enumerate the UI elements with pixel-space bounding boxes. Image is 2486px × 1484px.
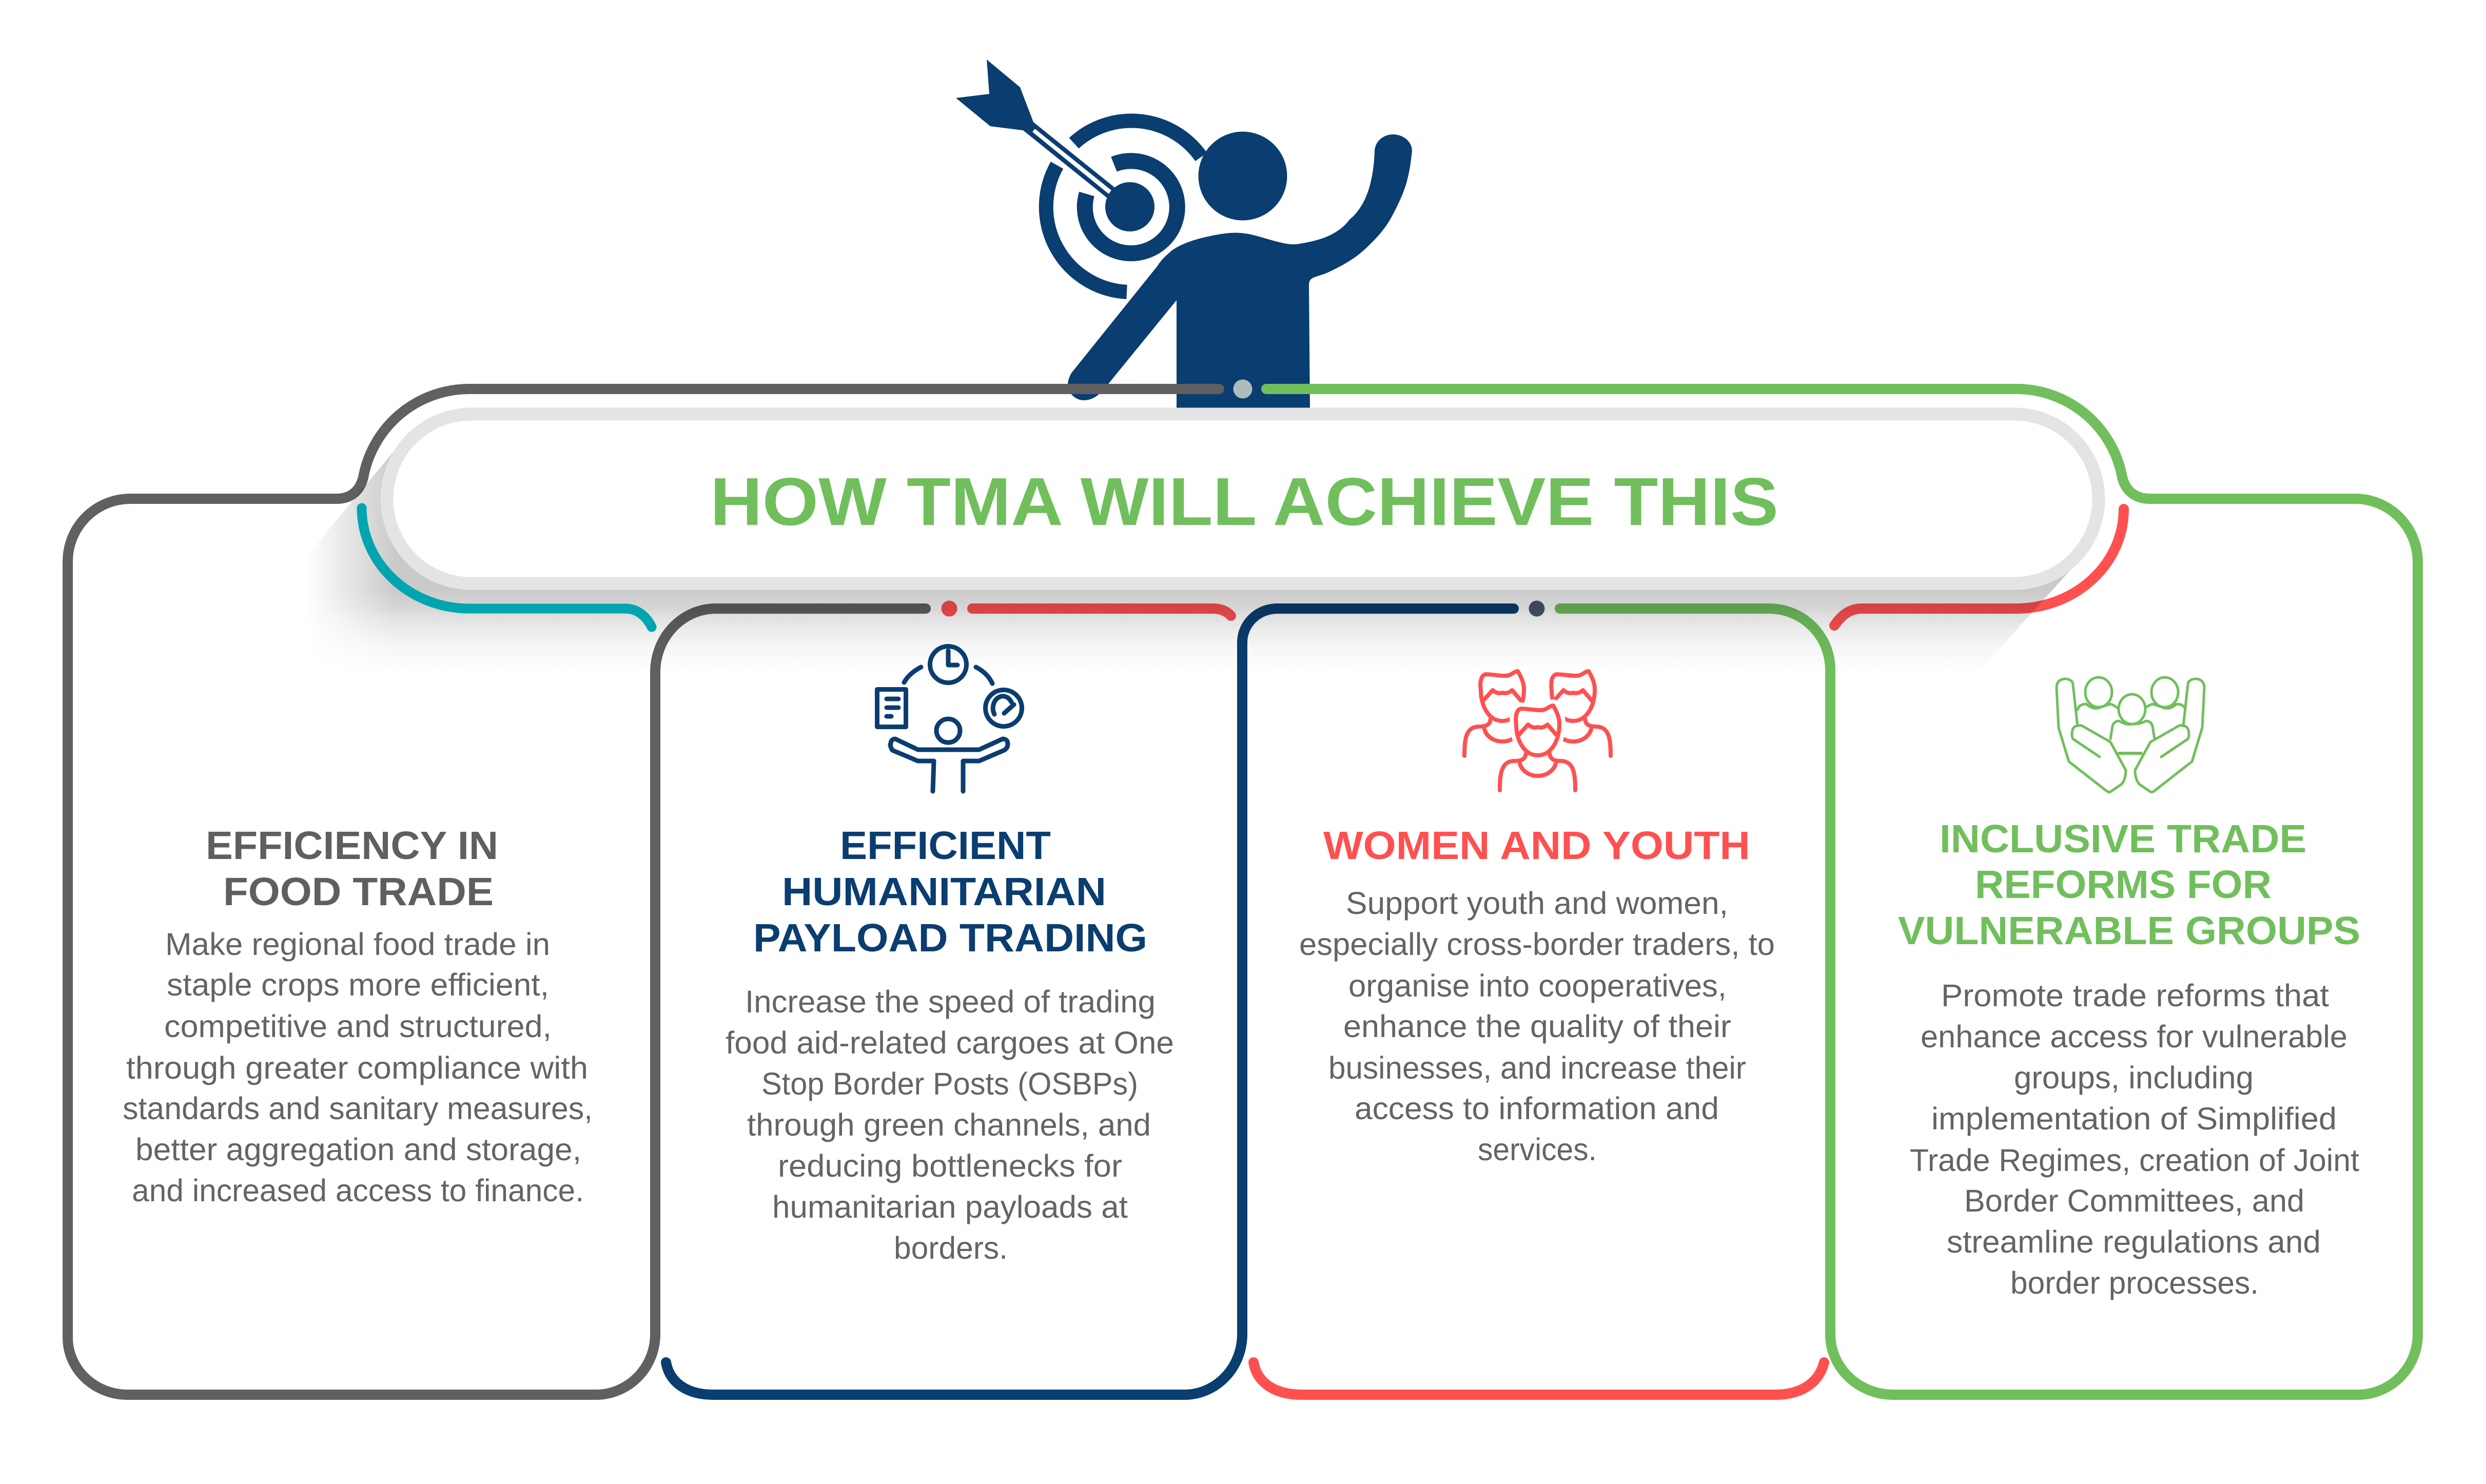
panel text: inclusive trade reforms for vulnerable groups (1898, 817, 2360, 1300)
heading: PAYLOAD TRADING (753, 916, 1147, 960)
body: services. (1478, 1132, 1597, 1167)
body: access to information and (1355, 1091, 1719, 1126)
body: Promote trade reforms that (1941, 978, 2329, 1013)
body: standards and sanitary measures, (123, 1091, 593, 1126)
icon: juggling tasks (877, 647, 1022, 791)
body: enhance access for vulnerable (1921, 1019, 2347, 1054)
heading: HUMANITARIAN (782, 870, 1106, 914)
centre person (1500, 706, 1575, 790)
body: through green channels, and (747, 1107, 1151, 1142)
heading: EFFICIENT (840, 824, 1051, 868)
header drop shadow (321, 452, 2070, 650)
heading: EFFICIENCY IN (206, 824, 498, 868)
navy connector dot (1529, 600, 1544, 617)
panel text: efficient humanitarian payload trading (726, 824, 1174, 1265)
body: and increased access to finance. (132, 1173, 584, 1208)
body: staple crops more efficient, (167, 967, 549, 1002)
body (1910, 978, 2359, 1300)
body: Make regional food trade in (165, 927, 550, 962)
heading: WOMEN AND YOUTH (1323, 824, 1750, 868)
juggling person (890, 719, 1008, 791)
accent curve: teal under header left (362, 508, 652, 627)
body: groups, including (2014, 1060, 2254, 1095)
clock (930, 647, 967, 682)
body (1299, 886, 1775, 1167)
body: reducing bottlenecks for (778, 1148, 1122, 1183)
heading: FOOD TRADE (223, 870, 494, 914)
gauge (985, 690, 1022, 727)
arcs between clock and items (904, 667, 992, 684)
body: food aid-related cargoes at One (726, 1025, 1174, 1060)
body: enhance the quality of their (1343, 1009, 1731, 1044)
arrow hitting target (956, 60, 1114, 198)
body: Support youth and women, (1346, 886, 1728, 921)
right person (1551, 671, 1611, 756)
target rings (1046, 121, 1201, 292)
body: Stop Border Posts (OSBPs) (761, 1066, 1138, 1101)
heading (1898, 817, 2360, 953)
heading (753, 824, 1147, 960)
body: borders. (894, 1231, 1008, 1265)
panel border: efficiency in food trade, header outline and humanitarian top (grey) (68, 389, 1219, 1395)
top connector dot (1234, 380, 1252, 398)
person body (1068, 134, 1412, 408)
heading (206, 824, 498, 914)
left person (1464, 671, 1524, 756)
document (877, 690, 906, 727)
icon: women and youth group (1464, 671, 1611, 790)
panel border: inclusive trade reforms and women and youth top (green) (1266, 389, 2418, 1395)
panel border: efficient humanitarian payload trading and women top (navy) (666, 609, 1514, 1395)
title banner (387, 414, 2099, 583)
heading: REFORMS FOR (1975, 863, 2272, 907)
body: businesses, and increase their (1328, 1050, 1746, 1085)
panel text: women and youth (1299, 824, 1775, 1167)
body: competitive and structured, (164, 1009, 552, 1044)
person head (1199, 131, 1287, 221)
left hand (2057, 679, 2126, 792)
heading: VULNERABLE GROUPS (1898, 909, 2360, 953)
body: border processes. (2010, 1265, 2259, 1300)
accent curve: red top of humanitarian panel (972, 609, 1231, 616)
body: Trade Regimes, creation of Joint (1910, 1143, 2359, 1178)
title text: HOW TMA WILL ACHIEVE THIS (710, 464, 1778, 539)
hero icon: person pointing at target with arrow (956, 60, 1412, 408)
body: streamline regulations and (1947, 1224, 2321, 1259)
three people (2078, 677, 2185, 753)
body: especially cross-border traders, to (1299, 927, 1775, 962)
target bullseye (1105, 182, 1154, 231)
icon: hands holding people (2057, 677, 2204, 792)
heading: INCLUSIVE TRADE (1940, 817, 2306, 861)
right hand (2135, 679, 2204, 792)
body (123, 927, 593, 1208)
panel text: efficiency in food trade (123, 824, 593, 1208)
body: organise into cooperatives, (1348, 968, 1727, 1003)
body (726, 984, 1174, 1265)
accent curve: red bottom of women and youth panel (1254, 1362, 1824, 1395)
accent curve: red under header right (1834, 509, 2124, 626)
body: humanitarian payloads at (772, 1189, 1128, 1224)
body: better aggregation and storage, (135, 1132, 581, 1167)
body: through greater compliance with (126, 1050, 588, 1085)
body: implementation of Simplified (1931, 1101, 2337, 1136)
body: Increase the speed of trading (745, 984, 1156, 1019)
body: Border Committees, and (1964, 1183, 2304, 1218)
red connector dot (941, 600, 957, 617)
